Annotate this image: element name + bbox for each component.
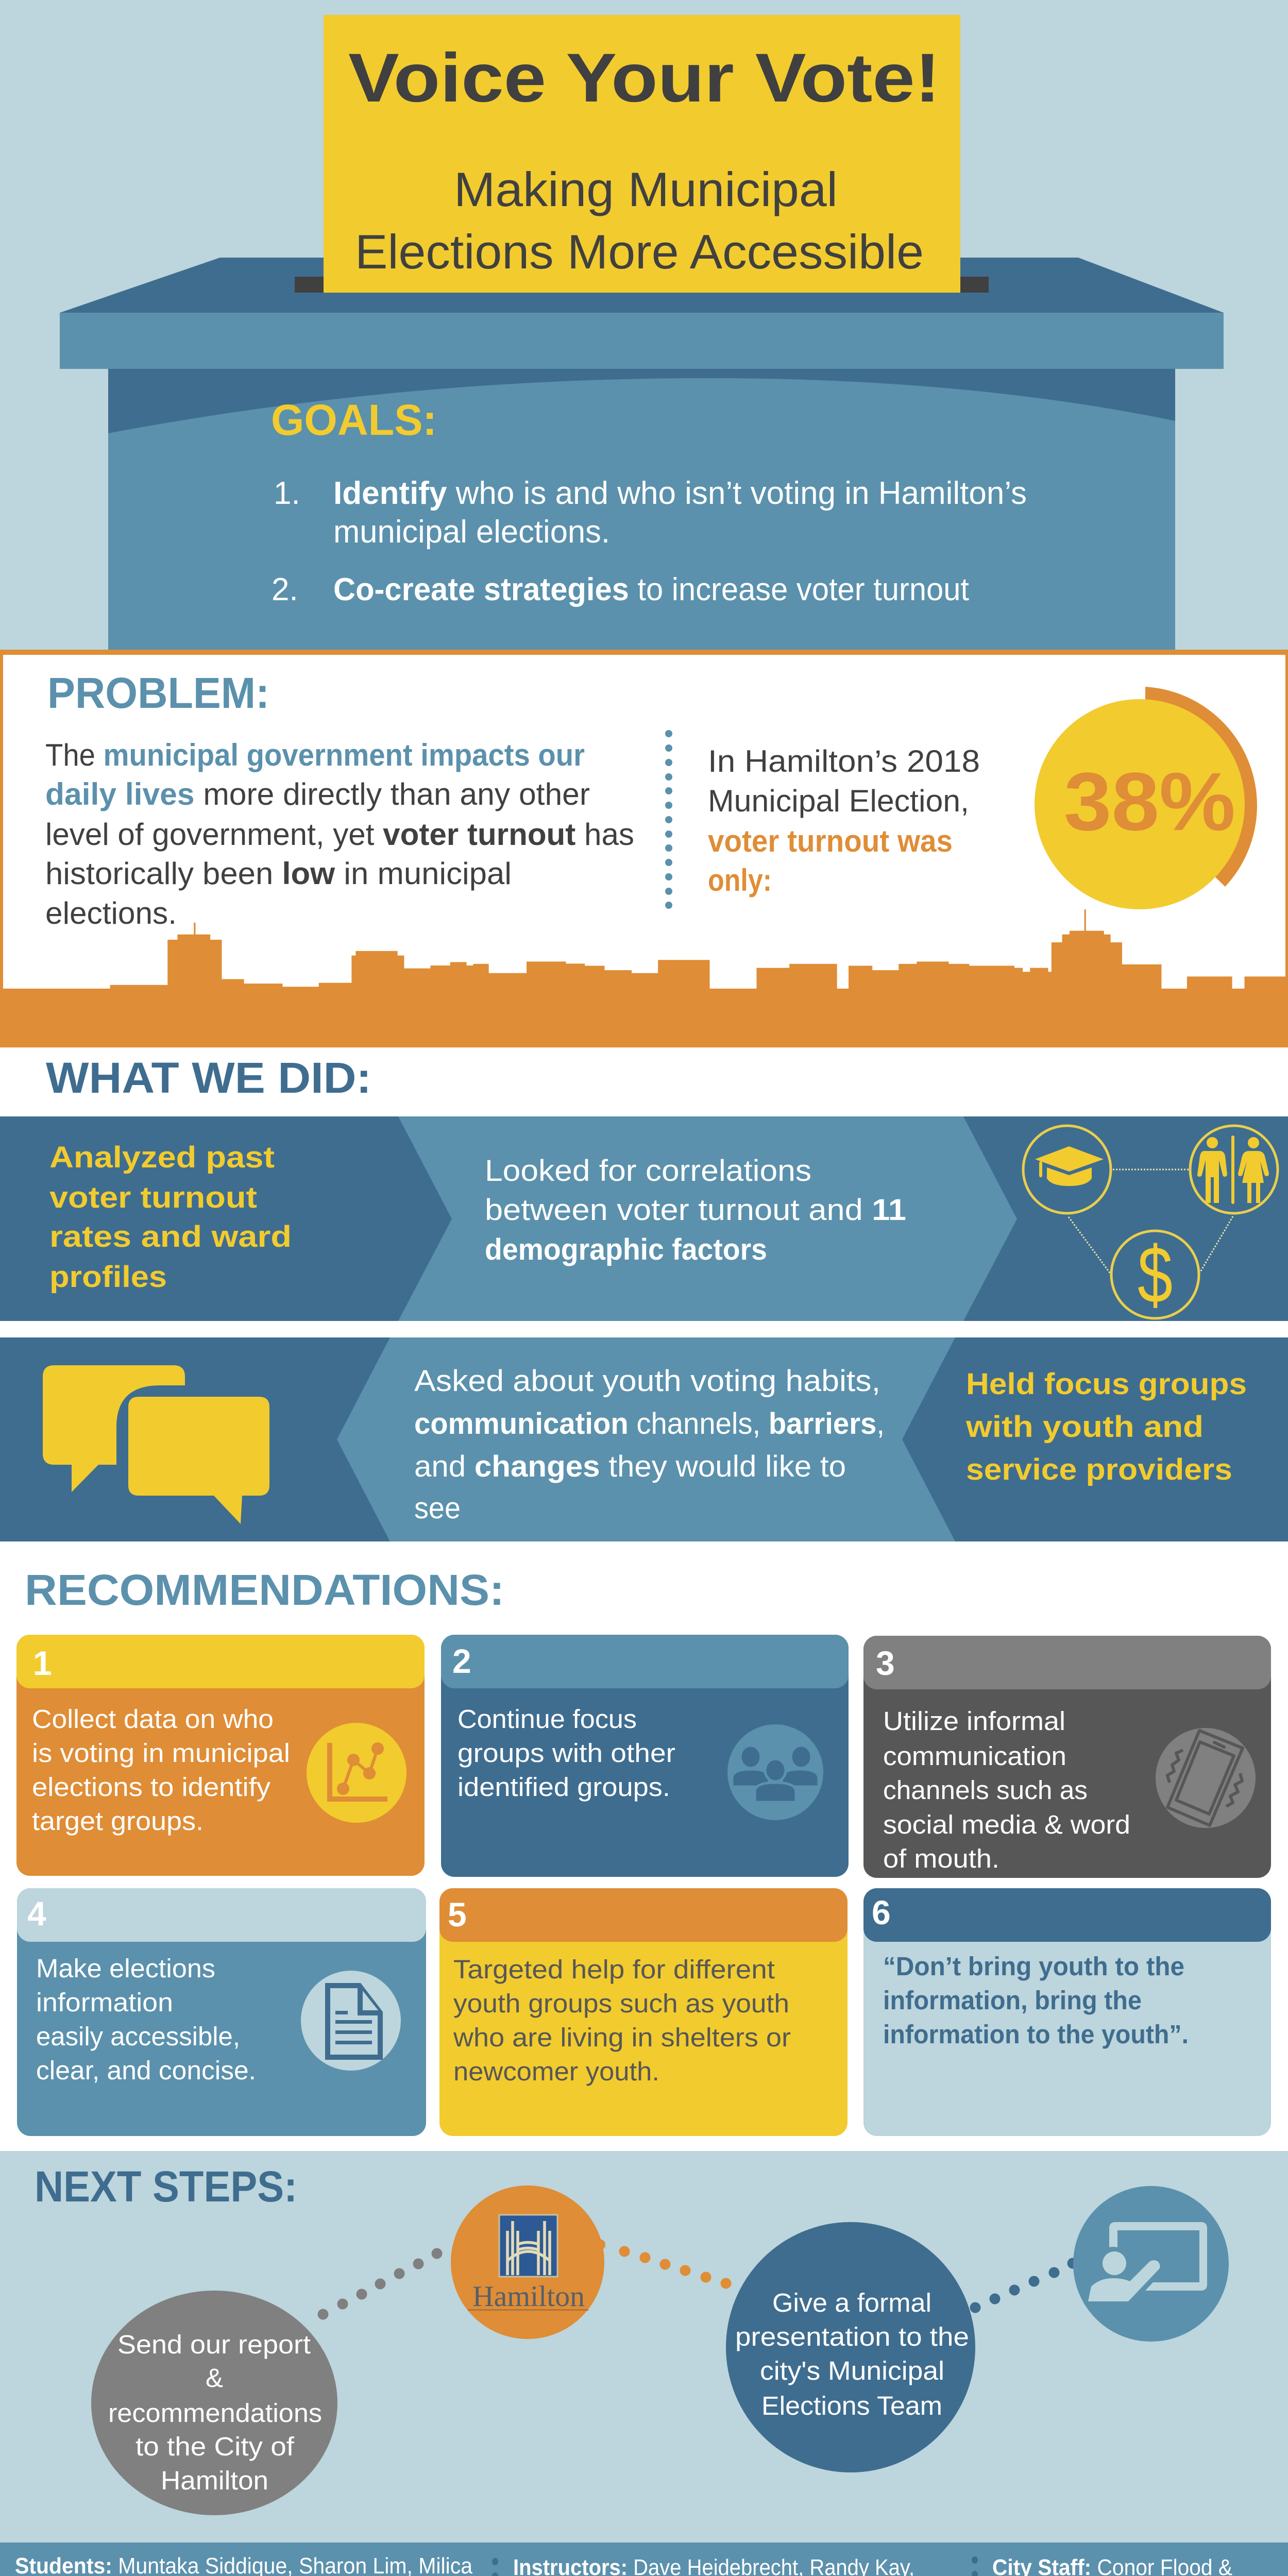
quote text: “Don’t bring youth to the (883, 1952, 1184, 1981)
step: send report: Send our report (117, 2330, 311, 2359)
panel: next steps (0, 2151, 1288, 2543)
panel: recommendation 5: 5 (448, 1895, 467, 1934)
panel: recommendation 1 (16, 1635, 425, 1876)
quote text: information, bring the (883, 1986, 1142, 2015)
turnout statement (708, 744, 980, 897)
goal 1: Identify who is and who isn’t voting in Hamilton’s (333, 476, 1027, 511)
goal 1 (274, 476, 1027, 550)
analyzed text: Analyzed past (49, 1141, 275, 1174)
icon: presenter at screen (1073, 2186, 1229, 2342)
card text: identified groups. (457, 1772, 670, 1802)
analyzed text: voter turnout (49, 1181, 257, 1214)
goal 1: municipal elections. (333, 514, 610, 550)
correlations text: Looked for correlations (485, 1154, 811, 1188)
card text: social media & word (883, 1810, 1130, 1839)
step: formal presentation: Give a formal (772, 2288, 931, 2317)
step: formal presentation: presentation to the (735, 2322, 969, 2351)
panel: recommendation 2: 2 (452, 1642, 471, 1680)
problem description: level of government, yet voter turnout has (45, 817, 634, 852)
turnout statement: In Hamilton’s 2018 (708, 744, 980, 778)
subtitle (355, 162, 924, 279)
icon: line chart (307, 1723, 406, 1823)
card text: Utilize informal (883, 1706, 1065, 1736)
panel: credits footer (0, 2543, 1288, 2576)
card text: information (36, 1988, 173, 2017)
38 percent gauge: 38% (1064, 755, 1235, 848)
dotted divider (665, 730, 672, 909)
panel: recommendation 5 (439, 1888, 848, 2136)
city skyline (0, 909, 1288, 1047)
goal 2: Co-create strategies to increase voter turnout (333, 572, 969, 607)
youth habits text: and changes they would like to (414, 1450, 846, 1483)
card text (457, 1704, 675, 1802)
panel: recommendation 2 (441, 1635, 849, 1877)
problem description: historically been low in municipal (45, 856, 512, 891)
analyzed text: rates and ward (49, 1220, 292, 1253)
ballot paper with title (324, 15, 960, 293)
panel: recommendation 3: 3 (876, 1644, 895, 1682)
icon: dollar sign (1111, 1230, 1199, 1320)
youth habits text (414, 1364, 885, 1525)
icon: man and woman (1190, 1126, 1278, 1213)
correlations text: between voter turnout and 11 (485, 1193, 906, 1227)
ballot box illustration (60, 258, 1224, 650)
correlations text: demographic factors (485, 1233, 767, 1266)
goals heading: GOALS: (271, 396, 437, 444)
turnout statement: voter turnout was (708, 824, 953, 858)
step: city of hamilton logo (451, 2185, 604, 2339)
card text: groups with other (457, 1738, 675, 1768)
heading: what we did: WHAT WE DID: (46, 1054, 371, 1102)
card text: clear, and concise. (36, 2056, 256, 2085)
card text: of mouth. (883, 1844, 999, 1873)
analyzed text: profiles (49, 1260, 167, 1294)
title: Voice Your Vote! (348, 40, 940, 116)
card text (883, 1706, 1130, 1873)
dotted connector: orange (594, 2239, 732, 2289)
step: send report: to the City of (135, 2432, 295, 2461)
step: city of hamilton logo: Hamilton (472, 2280, 585, 2313)
icon: people group (727, 1724, 823, 1820)
quote text: information to the youth”. (883, 2020, 1189, 2049)
step: send report: recommendations (108, 2398, 322, 2428)
card text: target groups. (32, 1806, 204, 1836)
panel: recommendation 6 (863, 1888, 1271, 2136)
icon: dollar sign: $ (1138, 1230, 1173, 1320)
youth habits text: see (414, 1492, 461, 1525)
problem description: The municipal government impacts our (45, 738, 585, 772)
turnout statement: only: (708, 863, 772, 897)
goal 2: 2. (272, 572, 298, 607)
card text: Collect data on who (32, 1704, 274, 1734)
focus groups text: Held focus groups (966, 1367, 1247, 1401)
goal 1: 1. (274, 476, 300, 511)
panel: recommendation 3 (863, 1636, 1271, 1878)
card text: Continue focus (457, 1704, 637, 1734)
focus groups text (965, 1367, 1247, 1486)
dotted connector: blue (970, 2258, 1078, 2313)
panel: recommendation 1: 1 (33, 1644, 52, 1682)
card text: who are living in shelters or (453, 2023, 791, 2052)
next steps heading: NEXT STEPS: (35, 2162, 297, 2211)
card text: is voting in municipal (32, 1738, 290, 1768)
card text: easily accessible, (36, 2022, 240, 2051)
card text: Targeted help for different (453, 1955, 775, 1984)
panel: focus groups band (0, 1337, 1288, 1541)
icon: vibrating phone (1156, 1728, 1256, 1828)
goals text block (271, 396, 1027, 607)
38 percent gauge (1035, 687, 1257, 909)
card text: communication (883, 1741, 1066, 1771)
focus groups text: service providers (966, 1453, 1232, 1486)
step: formal presentation: Elections Team (761, 2391, 942, 2420)
card text: channels such as (883, 1775, 1088, 1805)
youth habits text: communication channels, barriers, (414, 1407, 885, 1440)
analyzed text (49, 1141, 292, 1294)
quote text (883, 1952, 1189, 2049)
icon: document (301, 1971, 401, 2071)
card text (453, 1955, 791, 2086)
youth habits text: Asked about youth voting habits, (414, 1364, 880, 1398)
step: formal presentation: city's Municipal (760, 2356, 944, 2385)
correlations text (485, 1154, 906, 1266)
divider dots (492, 2556, 978, 2576)
focus groups text: with youth and (965, 1410, 1204, 1444)
panel: recommendation 4 (17, 1888, 426, 2136)
card text (36, 1954, 256, 2085)
panel: analyzed turnout band (0, 1116, 1288, 1321)
icon: speech bubbles (43, 1365, 269, 1524)
card text: elections to identify (32, 1772, 271, 1802)
panel: recommendation 6: 6 (872, 1893, 891, 1931)
step: send report: & (206, 2363, 223, 2393)
card text: newcomer youth. (453, 2057, 659, 2086)
problem description: elections. (45, 896, 177, 930)
card text (32, 1704, 290, 1836)
subtitle: Making Municipal (454, 162, 838, 216)
panel: problem (0, 650, 1288, 1047)
step: send report (91, 2291, 337, 2515)
card text: Make elections (36, 1954, 215, 1983)
problem heading: PROBLEM: (47, 669, 269, 717)
problem description: daily lives more directly than any other (45, 777, 590, 811)
dotted connector: gray (317, 2248, 442, 2319)
turnout statement: Municipal Election, (708, 784, 969, 818)
panel: recommendation 4: 4 (27, 1894, 46, 1933)
problem description (45, 738, 634, 930)
icon: graduation cap (1023, 1126, 1111, 1213)
step: send report: Hamilton (161, 2466, 268, 2495)
heading: recommendations: RECOMMENDATIONS: (25, 1566, 504, 1614)
subtitle: Elections More Accessible (355, 225, 924, 279)
step: formal presentation (726, 2222, 975, 2472)
card text: youth groups such as youth (453, 1989, 789, 2018)
demographic factor icons (1023, 1126, 1278, 1320)
